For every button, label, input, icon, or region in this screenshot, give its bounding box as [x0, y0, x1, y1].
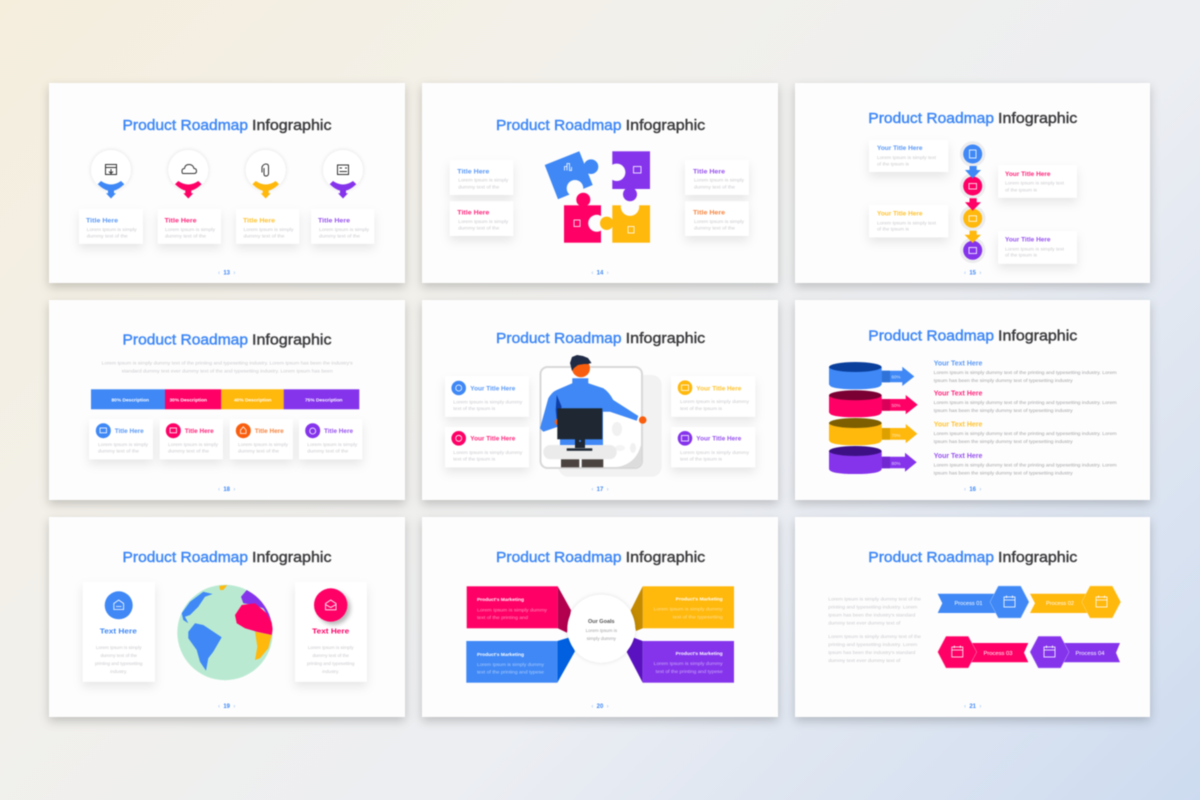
- text block 4: Lorem Ipsum is simply dummy text of the printing and typesetting industry. Lorem: [934, 462, 1117, 468]
- card: right top: Lorem Ipsum is simply: [694, 178, 745, 183]
- text block 2: Ipsum has been the simply dummy text of typesetting industry: [934, 408, 1073, 413]
- box: pink marketing: Lorem Ipsum is simply dummy: [477, 608, 548, 614]
- slide 16 title: Product Roadmap: [868, 327, 994, 344]
- slide 19: globe: [49, 517, 405, 717]
- left paragraph 2: [828, 634, 921, 663]
- arrow: blue: [965, 166, 981, 178]
- left paragraph 1: Lorem Ipsum is simply dummy text of the: [828, 596, 921, 602]
- slide 18 title: Infographic: [252, 332, 332, 348]
- card: description 3: Lorem Ipsum is simply: [238, 442, 289, 447]
- arrow: 80%: 80%: [891, 461, 901, 466]
- cylinder: blue: [829, 362, 882, 389]
- text block 2: [934, 390, 1117, 413]
- slide 20: goals diagram: [422, 517, 778, 717]
- page number 14: ‹ 14 ›: [591, 270, 609, 276]
- illustration: person at monitor: [540, 355, 662, 477]
- card: step 1: Title Here: [86, 218, 118, 224]
- text block 3: Your Text Here: [934, 422, 982, 428]
- segmented description bar: 30% Description: [170, 397, 207, 403]
- timeline node 4: [960, 238, 986, 263]
- card: description 3: [230, 419, 293, 459]
- card: step 1: [79, 209, 143, 244]
- card: description 2: Title Here: [185, 428, 214, 435]
- card: description 4: dummy text of the: [307, 448, 349, 454]
- cylinder: pink: [829, 390, 882, 417]
- text block 4: Your Text Here: [934, 453, 982, 460]
- slide 20 title: Infographic: [626, 549, 706, 566]
- center circle: our goals: simply dummy: [587, 636, 617, 641]
- box: purple marketing: [627, 638, 734, 683]
- box: pink marketing: text of the printing and: [477, 615, 528, 621]
- text block 1: Ipsum has been the simply dummy text of typesetting industry: [934, 378, 1073, 383]
- center circle: our goals: Lorem Ipsum is: [586, 628, 618, 633]
- slide 15 title: Infographic: [998, 110, 1078, 127]
- card: description 2: [160, 419, 223, 459]
- arrow: 60%: 60%: [891, 374, 901, 380]
- card: right top: Lorem Ipsum is simply dummy: [680, 399, 750, 404]
- process 01: Process 01: [954, 601, 982, 607]
- arrow: 60%: [880, 367, 914, 386]
- card: left top: [445, 376, 529, 417]
- slide 19 title: Product Roadmap: [122, 549, 248, 566]
- card: right bottom: Title Here: [693, 210, 725, 217]
- card: right top: dummy text of the: [694, 184, 735, 189]
- card: step 2: [158, 209, 221, 244]
- process 01: [938, 586, 1029, 618]
- box: blue marketing: [466, 638, 575, 683]
- page number 19: ‹ 19 ›: [218, 704, 235, 710]
- card: right bottom: dummy text of the: [694, 226, 735, 231]
- card: timeline item 4: of the Ipsum is: [1005, 253, 1038, 258]
- box: yellow marketing: [631, 586, 734, 631]
- card: right bottom: Lorem Ipsum is simply: [694, 219, 745, 224]
- card: left top: Your Title Here: [470, 385, 516, 392]
- card: step 4: [311, 209, 374, 244]
- slide 21 title: Infographic: [998, 549, 1078, 566]
- left paragraph 1: dummy text ever dummy text of: [828, 620, 901, 626]
- card: right text: Lorem Ipsum is simply: [308, 645, 354, 650]
- slide 15: vertical timeline: [795, 83, 1150, 283]
- arrow: pink: [965, 198, 981, 211]
- card: right text: Text Here: [312, 626, 349, 636]
- page number 13: ‹ 13 ›: [218, 270, 235, 276]
- left paragraph 2: printing and typesetting industry. Lorem: [828, 642, 917, 647]
- card: left text: Text Here: [100, 626, 137, 636]
- step 1 circle and blue arrow: [91, 150, 131, 198]
- slide 18 title: Product Roadmap: [122, 332, 248, 348]
- segmented description bar: 40% Description: [234, 397, 272, 403]
- card: step 3: [236, 209, 299, 244]
- slide 18: percent bar: [49, 300, 405, 500]
- timeline node 1: [960, 141, 986, 167]
- card: description 1: Title Here: [115, 428, 144, 435]
- card: left top: [450, 160, 513, 195]
- arrow: 50%: 50%: [891, 403, 901, 408]
- timeline node 2: [960, 173, 986, 199]
- puzzle piece: pink: [564, 193, 605, 243]
- card: step 3: dummy text of the: [244, 234, 285, 238]
- card: right text: printing and typesetting: [307, 661, 355, 666]
- arrow: 70%: 70%: [891, 433, 901, 438]
- card: left bottom: [445, 427, 529, 467]
- card: timeline item 3: Lorem Ipsum is simply text: [877, 220, 937, 225]
- card: left bottom: dummy text of the: [458, 226, 500, 231]
- card: left top: dummy text of the: [458, 184, 500, 189]
- card: right top: Title Here: [693, 168, 725, 175]
- card: timeline item 2: [998, 165, 1077, 198]
- box: purple marketing: text of the printing and typese: [656, 669, 723, 675]
- box: purple marketing: Product's Marketing: [676, 651, 723, 657]
- cylinder: yellow: [829, 418, 882, 445]
- card: step 2: dummy text of the: [165, 234, 206, 238]
- card: description 2: Lorem Ipsum is simply: [168, 442, 219, 447]
- box: blue marketing: text of the printing and typese: [477, 670, 544, 676]
- card: left bottom: Lorem Ipsum is simply dummy: [453, 450, 523, 455]
- page number 15: ‹ 15 ›: [964, 270, 981, 276]
- box: yellow marketing: Lorem Ipsum is simply dummy: [654, 606, 723, 612]
- page number 16: ‹ 16 ›: [964, 487, 981, 493]
- segmented description bar: 75% Description: [305, 397, 343, 403]
- card: right bottom: Your Title Here: [696, 436, 742, 443]
- slide 17 title: Product Roadmap: [496, 330, 622, 347]
- card: timeline item 3: [869, 205, 948, 237]
- card: left text: Lorem Ipsum is simply: [96, 645, 142, 650]
- page number 18: ‹ 18 ›: [218, 487, 235, 493]
- left paragraph 2: Ipsum has been the industry's standard: [828, 650, 916, 655]
- card: right text: industry.: [322, 669, 339, 674]
- slide 21 title: Product Roadmap: [868, 549, 994, 566]
- slide 16 title: Infographic: [998, 327, 1078, 344]
- card: right top: [685, 160, 749, 195]
- card: right top: text of the Ipsum is: [680, 406, 723, 411]
- arrow: 50%: [880, 395, 918, 414]
- card: description 1: [89, 419, 153, 459]
- card: left top: Lorem Ipsum is simply: [458, 178, 509, 183]
- slide 13: circles with arrows: [49, 83, 405, 283]
- card: step 4: Lorem Ipsum is simply: [319, 227, 370, 232]
- card: right text: dummy text of the: [312, 653, 349, 658]
- text block 1: Your Text Here: [934, 360, 982, 367]
- card: timeline item 4: Your Title Here: [1005, 237, 1051, 244]
- slide 16: stacked cylinders: [795, 300, 1150, 500]
- left paragraph 1: printing and typesetting industry. Lorem: [828, 604, 917, 610]
- card: left top: text of the Ipsum is: [453, 406, 496, 411]
- card: right top: [671, 376, 755, 417]
- timeline node 3: [960, 206, 986, 231]
- card: description 1: dummy text of the: [98, 448, 139, 454]
- slide 13 title: Product Roadmap: [122, 117, 248, 134]
- segmented description bar: [91, 389, 359, 409]
- segmented description bar: 80% Description: [112, 397, 149, 403]
- card: left top: Title Here: [457, 168, 490, 175]
- card: description 3: Title Here: [255, 428, 284, 435]
- slide 14 title: Product Roadmap: [496, 117, 622, 134]
- box: purple marketing: Lorem Ipsum is simply dummy: [654, 661, 723, 667]
- page number 20: ‹ 20 ›: [591, 704, 609, 710]
- card: step 1: dummy text of the: [87, 234, 128, 238]
- intro paragraph: [102, 360, 353, 373]
- slide 14: puzzle: [422, 83, 778, 283]
- box: pink marketing: Product's Marketing: [477, 597, 524, 603]
- process 04: Process 04: [1076, 651, 1104, 657]
- card: description 4: Lorem Ipsum is simply: [307, 442, 358, 447]
- card: description 2: dummy text of the: [168, 448, 209, 454]
- card: step 4: dummy text of the: [319, 234, 360, 238]
- card: description 1: Lorem Ipsum is simply: [98, 442, 149, 447]
- card: left bottom: text of the Ipsum is: [453, 456, 496, 461]
- box: yellow marketing: text of the typesetting: [673, 614, 723, 620]
- card: timeline item 1: Lorem Ipsum is simply text: [877, 155, 937, 160]
- text block 2: Lorem Ipsum is simply dummy text of the printing and typesetting industry. Lorem: [934, 400, 1117, 405]
- card: left bottom: Your Title Here: [470, 436, 516, 443]
- card: description 4: [299, 419, 362, 459]
- card: step 2: Lorem Ipsum is simply: [165, 227, 216, 232]
- slide 17 title: Infographic: [626, 330, 706, 347]
- card: step 3: Lorem Ipsum is simply: [244, 227, 294, 232]
- card: left bottom: [450, 201, 513, 236]
- infographic canvas: [44, 83, 1154, 726]
- globe with continents: [177, 585, 273, 680]
- card: timeline item 2: Your Title Here: [1005, 171, 1051, 178]
- card: timeline item 1: of the Ipsum is: [877, 161, 910, 166]
- process 02: Process 02: [1046, 601, 1074, 607]
- box: blue marketing: Product's Marketing: [477, 652, 524, 658]
- card: timeline item 1: Your Title Here: [877, 145, 923, 152]
- box: blue marketing: Lorem Ipsum is simply dummy: [477, 662, 545, 668]
- card: left text: [83, 582, 155, 682]
- card: timeline item 1: [869, 140, 948, 172]
- card: right bottom: text of the Ipsum is: [680, 456, 723, 461]
- card: step 1: Lorem Ipsum is simply: [87, 227, 137, 232]
- card: timeline item 4: Lorem Ipsum is simply text: [1005, 246, 1065, 251]
- card: right bottom: [671, 427, 755, 467]
- text block 3: Lorem Ipsum is simply dummy text of the printing and typesetting industry. Lorem: [934, 431, 1117, 436]
- card: left top: Lorem Ipsum is simply dummy: [453, 400, 523, 404]
- slide 17: person at monitor: [422, 300, 778, 500]
- box: pink marketing: [467, 586, 571, 633]
- card: step 3: Title Here: [243, 218, 275, 224]
- card: timeline item 2: of the Ipsum is: [1005, 187, 1038, 192]
- left paragraph 2: Lorem Ipsum is simply dummy text of the: [828, 634, 921, 639]
- process 04: [1030, 636, 1120, 668]
- card: description 4: Title Here: [324, 428, 353, 435]
- arrow: 80%: [880, 453, 917, 472]
- puzzle piece: purple: [608, 151, 650, 201]
- left paragraph 1: [828, 596, 921, 626]
- card: timeline item 2: Lorem Ipsum is simply text: [1005, 181, 1065, 186]
- puzzle piece: yellow: [600, 198, 650, 243]
- page number 17: ‹ 17 ›: [591, 487, 609, 493]
- card: left text: dummy text of the: [100, 653, 137, 658]
- card: timeline item 4: [998, 231, 1077, 264]
- text block 4: [934, 453, 1117, 476]
- card: step 4: Title Here: [318, 218, 350, 224]
- card: timeline item 3: of the Ipsum is: [877, 227, 910, 232]
- slide 15 title: Product Roadmap: [868, 110, 994, 127]
- intro paragraph: Lorem Ipsum is simply dummy text of the printing and typesetting industry. Lorem Ipsum has been the industry's: [102, 360, 353, 365]
- card: left text: printing and typesetting: [95, 661, 143, 666]
- step 2 circle and pink arrow: [168, 150, 208, 198]
- text block 2: Your Text Here: [934, 390, 982, 397]
- left paragraph 2: dummy text ever dummy text of: [828, 658, 901, 663]
- center circle: our goals: Our Goals: [588, 619, 615, 625]
- card: left text: industry.: [110, 669, 127, 674]
- card: description 3: dummy text of the: [238, 448, 279, 454]
- step 3 circle and yellow arrow: [246, 150, 286, 198]
- slide 21: process ribbons: [795, 517, 1150, 717]
- page number 21: ‹ 21 ›: [964, 704, 981, 710]
- slide 20 title: Product Roadmap: [496, 549, 622, 566]
- process 03: Process 03: [984, 651, 1012, 657]
- card: right text: [295, 582, 367, 682]
- card: step 2: Title Here: [164, 218, 197, 224]
- left paragraph 1: Ipsum has been the industry's standard: [828, 612, 916, 618]
- text block 3: Ipsum has been the simply dummy text of typesetting industry: [934, 439, 1073, 444]
- arrow: 70%: [880, 424, 917, 443]
- text block 4: Ipsum has been the simply dummy text of typesetting industry: [934, 470, 1073, 476]
- card: right bottom: Lorem Ipsum is simply dummy: [680, 450, 750, 455]
- card: right bottom: [685, 201, 749, 236]
- process 02: [1030, 586, 1121, 618]
- text block 3: [934, 422, 1117, 444]
- card: timeline item 3: Your Title Here: [877, 210, 923, 217]
- slide 19 title: Infographic: [252, 549, 332, 566]
- slide 13 title: Infographic: [252, 117, 332, 134]
- arrow: yellow: [964, 231, 981, 243]
- box: yellow marketing: Product's Marketing: [676, 596, 723, 602]
- text block 1: [934, 360, 1117, 383]
- slide 14 title: Infographic: [626, 117, 706, 134]
- text block 1: Lorem Ipsum is simply dummy text of the printing and typesetting industry. Lorem: [934, 370, 1117, 375]
- puzzle piece: blue: [545, 151, 598, 199]
- card: left bottom: Lorem Ipsum is simply: [458, 219, 509, 224]
- card: left bottom: Title Here: [457, 210, 490, 217]
- cylinder: purple: [829, 446, 882, 474]
- step 4 circle and purple arrow: [323, 150, 363, 198]
- card: right top: Your Title Here: [696, 385, 742, 392]
- intro paragraph: standard dummy text ever dummy text of the and typesetting industry. Lorem Ipsum has been: [122, 368, 333, 373]
- process 03: [938, 636, 1028, 668]
- center circle: our goals: [567, 595, 635, 663]
